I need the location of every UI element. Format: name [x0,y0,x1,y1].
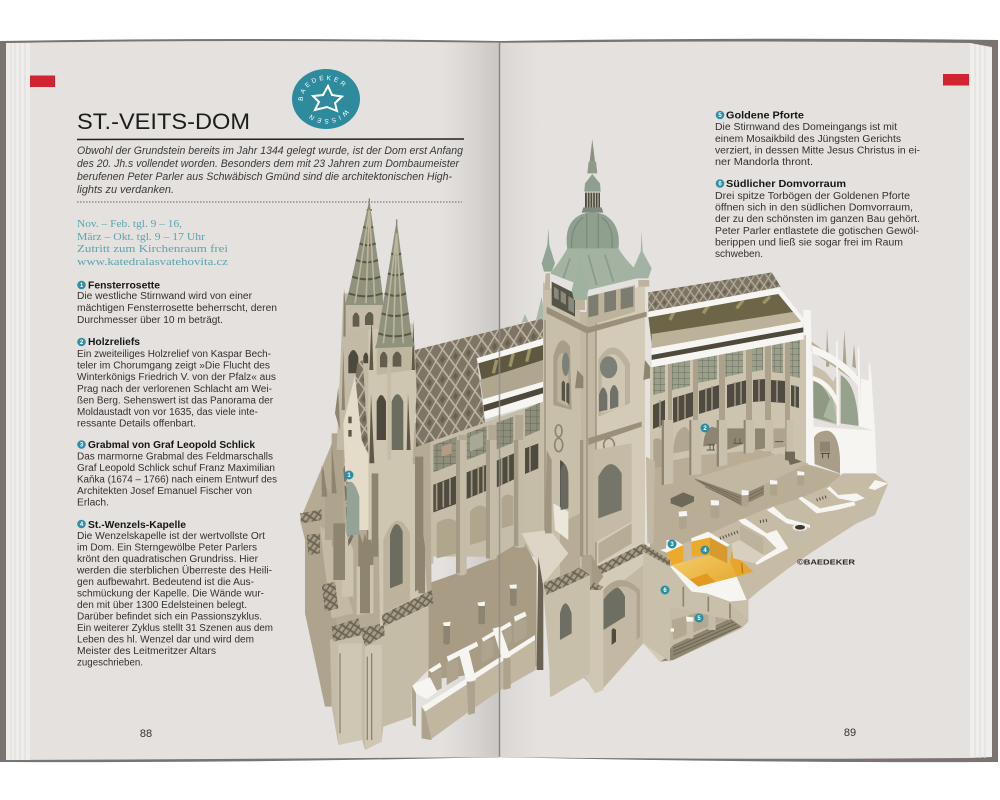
text block 1: Fensterrosette: Durchmesser über 10 m beträgt. [77,315,223,326]
chapel walls [667,537,753,577]
legend markers on the illustration: 4 [703,548,707,554]
text block 4: St.-Wenzels-Kapelle: Leben des hl. Wenzel dar und wird dem [77,634,254,646]
choir back wall with windows [650,335,806,480]
text block 5: Goldene Pforte: ner Mandorla thront. [715,157,813,168]
text block 4: St.-Wenzels-Kapelle: werden die sterblichen Überreste des Heili- [76,564,272,576]
page number left: 88 [140,728,152,740]
text block 6: Südlicher Domvorraum: berippen und ließ sie sogar frei im Raum [715,238,903,248]
text block 2: Holzreliefs: teler im Chorumgang zeigt »Die Flucht des [77,360,270,372]
text block 3: Grabmal: Grabmal von Graf Leopold Schlick [88,440,255,451]
crossing tower [522,139,670,697]
text block 6: Südlicher Domvorraum: Peter Parler entlastete die gotischen Gewöl- [715,226,919,237]
intro text: berufenen Peter Parler aus Schwäbisch Gmünd sind die architektonischen High- [77,171,452,183]
text block 2: Holzreliefs [77,337,276,430]
spire 1 [345,198,383,305]
text block 5: Goldene Pforte: 5 [718,113,722,119]
text block 6: Südlicher Domvorraum [715,179,920,260]
vestibule columns [671,600,716,638]
cut pillars [679,471,804,529]
intro text: des 20. Jh.s vollendet worden. Besonders dem mit 23 Jahren zum Dombaumeister [77,158,460,170]
chapel floor [672,555,737,588]
text block 4: St.-Wenzels-Kapelle: gen aufbewahrt. Bedeutend ist die Aus- [77,577,254,588]
text block 4: St.-Wenzels-Kapelle: Darüber befindet sich ein Passionszyklus. [77,612,262,622]
text block 6: Südlicher Domvorraum: schweben. [715,249,763,260]
interior of south annex [732,540,765,563]
nave roof [415,297,545,447]
right window [588,347,642,445]
text block 2: Holzreliefs: ßen Berg. Sehenswert ist das Panorama der [77,396,274,406]
text block 5: Goldene Pforte: Goldene Pforte [726,110,804,122]
spire and lantern [582,139,603,213]
text block 4: St.-Wenzels-Kapelle: 4 [80,522,84,528]
text block 4: St.-Wenzels-Kapelle: krönt den quadratischen Grundriss. Hier [77,554,259,565]
text block 4: St.-Wenzels-Kapelle: Die Wenzelskapelle ist der wertvollste Ort [77,531,265,542]
parapet lattice [300,509,385,647]
legend markers on the illustration: 2 [703,426,707,432]
text block 1: Fensterrosette: Die westliche Stirnwand wird von einer [77,291,253,302]
spire 2 [375,219,415,348]
tomb of Schlick [671,492,694,507]
title rule [77,138,464,140]
left window [553,340,572,410]
legend markers on the illustration: 5 [697,616,701,622]
buttresses and pinnacles [322,433,373,615]
text block 4: St.-Wenzels-Kapelle: im Dom. Ein Sterngewölbe Peter Parlers [77,542,257,554]
left page [6,41,499,760]
choir upper roof and cut [648,272,808,367]
intro text [77,145,464,196]
lower tower windows and parapet [560,443,670,693]
icon: star [313,86,342,111]
nave floor [412,440,537,740]
dotted divider [77,201,462,203]
gutter line [498,42,500,757]
legend markers on the illustration: 1 [347,473,351,479]
text block 1: Fensterrosette: mächtigen Fensterrosette beherrscht, deren [77,303,277,314]
west front lower walls [300,420,432,750]
text block 2: Holzreliefs: Winterkönigs Friedrich V. von der Pfalz« aus [77,372,276,383]
text block 3: Grabmal [77,440,277,508]
legend markers on the illustration [344,424,710,622]
opening hours: März – Okt. tgl. 9 – 17 Uhr [77,231,205,243]
red tab left [30,76,55,87]
upper tower windows [547,282,650,452]
red tab right [943,74,969,86]
text block 3: Grabmal: Kaňka (1674 – 1766) nach einem Entwurf des [77,474,277,486]
text block 6: Südlicher Domvorraum: Südlicher Domvorraum [726,179,846,190]
cut pillars of nave [443,584,517,645]
front tower lower portion [322,457,433,627]
page number right: 89 [844,727,856,739]
rear west tower [335,198,383,450]
text block 4: St.-Wenzels-Kapelle: Meister des Leitmeritzer Altars [77,646,216,657]
title: ST.-VEITS-DOM [77,109,250,134]
text block 1: Fensterrosette [77,280,277,326]
text block 5: Goldene Pforte: verziert, in dessen Mitte Jesus Christus in ei- [715,146,920,156]
text block 1: Fensterrosette: Fensterrosette [88,280,160,292]
white cut tops of chapel [660,480,888,602]
lower-left face of tower [522,440,590,697]
legend markers on the illustration: 6 [663,588,667,594]
text block 3: Grabmal: Erlach. [77,498,109,508]
text block 5: Goldene Pforte: Die Stirnwand des Domeingangs ist mit [715,122,897,133]
text block 2: Holzreliefs: Prag nach der verlorenen Schlacht am Wei- [77,384,272,395]
text block 2: Holzreliefs: Holzreliefs [88,337,140,348]
choir arcade [653,420,808,529]
well [787,524,810,553]
text block 2: Holzreliefs: 2 [80,340,84,346]
front west tower [343,219,417,547]
wall under chapel [670,568,748,620]
south cut walls and chapel [660,473,888,662]
text block 2: Holzreliefs: ressante Details offenbart. [77,418,196,430]
text block 4: St.-Wenzels-Kapelle: Ein weiterer Zyklus stellt 31 Szenen aus dem [77,623,273,634]
dome [542,139,652,310]
south nave wall with white cuts [412,612,536,740]
text block 4: St.-Wenzels-Kapelle: St.-Wenzels-Kapelle [88,520,186,531]
text block 3: Grabmal: Das marmorne Grabmal des Feldmarschalls [77,452,273,462]
badge: Baedeker Wissen: WISSEN [309,110,350,124]
flying buttresses at east end [803,310,877,478]
opening hours: Zutritt zum Kirchenraum frei [77,243,228,255]
text block 2: Holzreliefs: Ein zweiteiliges Holzrelief von Kaspar Bech- [77,349,271,360]
right page [500,42,992,759]
text block 4: St.-Wenzels-Kapelle: zugeschrieben. [77,658,143,668]
altar platform [695,452,808,506]
badge: Baedeker Wissen: BAEDEKER [298,75,346,101]
illustration credit: ©BAEDEKER [797,558,855,566]
intro text: lights zu verdanken. [77,184,174,196]
badge: Baedeker Wissen [292,69,360,129]
text block 5: Goldene Pforte: einem Mosaikbild des Jüngsten Gerichts [715,134,901,145]
turrets [542,228,652,300]
text block 3: Grabmal: 3 [80,443,84,449]
text block 4: St.-Wenzels-Kapelle [76,520,273,668]
nave interior wall [417,402,543,557]
choir floor [650,450,840,570]
text block 4: St.-Wenzels-Kapelle: den mit über 1300 Edelsteinen belegt. [77,600,247,611]
intro text: Obwohl der Grundstein bereits im Jahr 1344 gelegt wurde, ist der Dom erst Anfang [77,145,464,157]
opening hours [77,218,228,268]
text block 3: Grabmal: Architekten Josef Emanuel Fischer von [77,486,252,497]
legend markers on the illustration: 3 [670,542,674,548]
text block 6: Südlicher Domvorraum: Drei spitze Torbögen der Goldenen Pforte [715,191,910,202]
opening hours: Nov. – Feb. tgl. 9 – 16, [77,218,182,230]
text block 6: Südlicher Domvorraum: der zu den schönsten im ganzen Bau gehört. [715,214,920,225]
text block 6: Südlicher Domvorraum: 6 [718,182,722,188]
text block 1: Fensterrosette: 1 [80,283,84,289]
text block 2: Holzreliefs: Moldaustadt von vor 1635, das viele inte- [77,407,258,418]
text block 6: Südlicher Domvorraum: öffnen sich in den südlichen Domvorraum, [715,202,913,214]
steps of Golden Gate [660,603,742,662]
text block 5: Goldene Pforte [715,110,920,168]
text block 4: St.-Wenzels-Kapelle: schmückung der Kapelle. Die Wände wur- [77,588,264,600]
text block 3: Grabmal: Graf Leopold Schlick schuf Franz Maximilian [77,463,275,474]
cathedral cutaway illustration [300,139,888,750]
opening hours: www.katedralasvatehovita.cz [77,256,228,268]
